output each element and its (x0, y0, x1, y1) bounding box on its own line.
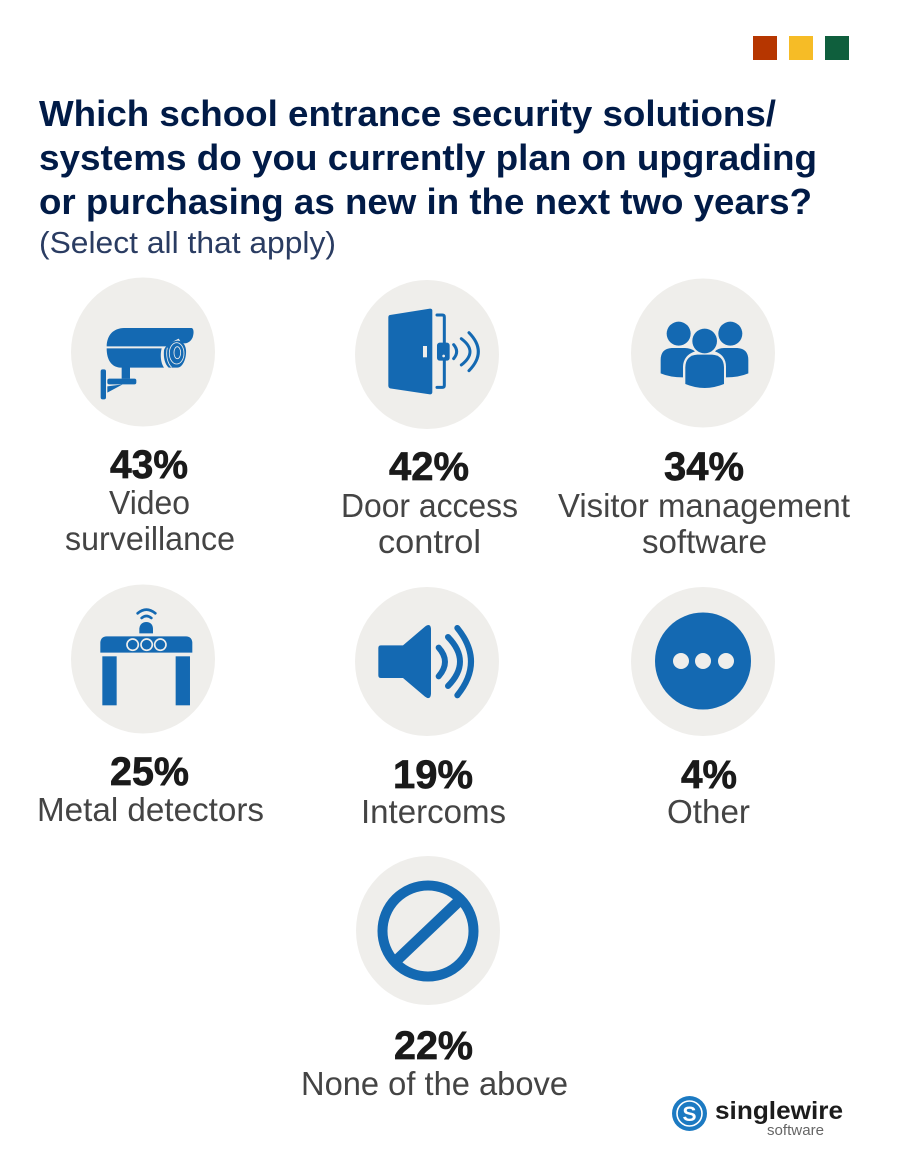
colour squares (753, 36, 849, 60)
label (65, 484, 235, 557)
label: Video (109, 484, 190, 521)
label: Metal detectors (37, 791, 264, 828)
label: Visitor management (558, 487, 850, 524)
value: 43% (110, 443, 188, 487)
icon: door with signal (355, 280, 499, 429)
subtitle: (Select all that apply) (39, 225, 336, 260)
label: Other (667, 793, 750, 830)
item: none of the above (301, 856, 568, 1102)
label: None of the above (301, 1065, 568, 1102)
label: Intercoms (361, 793, 506, 830)
icon: prohibition sign (356, 856, 500, 1005)
value: 34% (664, 445, 744, 489)
item: other (631, 587, 775, 830)
icon: three people (631, 278, 775, 428)
value: 22% (394, 1024, 473, 1068)
icon: three dots (631, 587, 775, 736)
item: visitor management software (558, 278, 850, 560)
logo wordmark: singlewire (715, 1097, 843, 1125)
label (558, 487, 850, 560)
label: surveillance (65, 520, 235, 557)
logo subtext: software (767, 1122, 824, 1139)
label: Door access (341, 487, 518, 524)
title: Which school entrance security solutions/ (39, 93, 776, 134)
icon: metal detector gate (71, 584, 215, 734)
logo: singlewire software (672, 1096, 843, 1139)
title (39, 93, 817, 222)
logo mark: S (682, 1103, 697, 1126)
item: door access control (341, 280, 518, 560)
value: 19% (393, 753, 473, 797)
value: 4% (681, 753, 737, 797)
icon: security camera (71, 278, 215, 426)
title: systems do you currently plan on upgrading (39, 137, 817, 178)
value: 25% (110, 750, 189, 794)
title: or purchasing as new in the next two years? (39, 181, 812, 222)
item: metal detectors (37, 584, 264, 828)
logo mark (672, 1096, 707, 1131)
item: intercoms (355, 587, 506, 830)
label (341, 487, 518, 560)
value: 42% (389, 445, 469, 489)
label: software (642, 523, 767, 560)
item: video surveillance (65, 278, 235, 557)
label: control (378, 523, 481, 560)
icon: speaker (355, 587, 499, 736)
